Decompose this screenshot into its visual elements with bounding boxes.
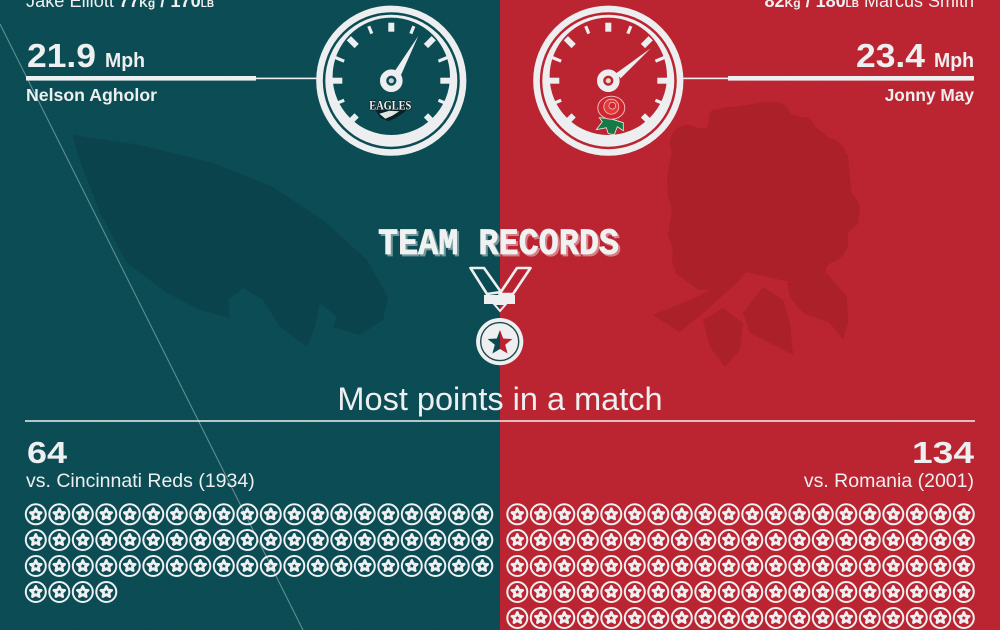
pictogram: Eagles 64 points	[26, 504, 492, 602]
gauge: Eagles speedometer	[320, 9, 463, 152]
icon: Eagles logo	[369, 98, 411, 121]
stat: Nelson Agholor speed: Nelson Agholor	[26, 85, 157, 105]
stat: Jonny May speed: Mph	[934, 50, 974, 72]
stat: Eagles most points: 64	[27, 435, 68, 470]
watermark: eagle silhouette	[73, 135, 388, 347]
stat: Nelson Agholor speed: 21.9	[27, 38, 96, 75]
pictogram: England 134 points	[507, 504, 974, 628]
diagonal line	[0, 24, 303, 630]
panel: England background	[500, 0, 1000, 630]
icon: Eagles logo: EAGLES	[369, 98, 411, 113]
stat: Eagles most points	[26, 435, 255, 492]
stat: Jonny May speed	[683, 38, 974, 105]
watermark: rose silhouette	[653, 102, 859, 367]
stat: Jonny May speed: Jonny May	[885, 85, 974, 105]
stat: England most points: vs. Romania (2001)	[804, 470, 974, 492]
icon: medal	[470, 268, 530, 365]
heading: Team Records: TEAM RECORDS	[378, 224, 619, 266]
gauge: England speedometer	[536, 9, 680, 152]
stat: Jonny May speed: 23.4	[856, 38, 925, 75]
panel: Eagles background	[0, 0, 500, 630]
icon: England rose logo	[596, 96, 625, 135]
stat: England most points: 134	[912, 435, 975, 470]
stat: Nelson Agholor speed: Mph	[105, 50, 145, 72]
stat: Eagles most points: vs. Cincinnati Reds (1934)	[26, 470, 255, 492]
stat: England most points	[804, 435, 975, 492]
heading: Most points in a match: Most points in a match	[337, 381, 663, 417]
stat: Nelson Agholor speed	[26, 38, 318, 105]
